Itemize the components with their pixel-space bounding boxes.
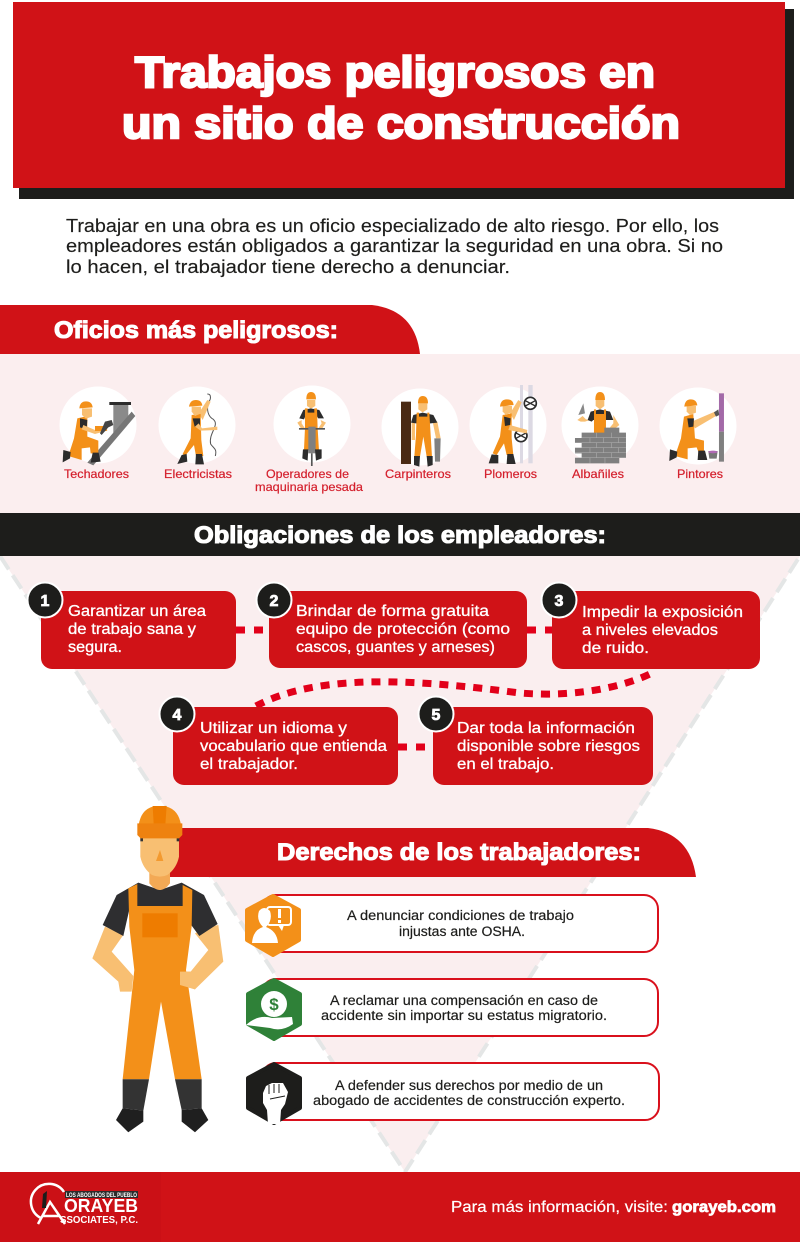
panel: inverted triangle background [0, 556, 800, 1172]
obligation 1: 1 [41, 593, 50, 610]
title banner [13, 2, 794, 199]
obligation 4 [160, 696, 398, 785]
dotted connectors [236, 630, 656, 747]
obligation 5: 5 [432, 707, 441, 724]
intro paragraph: lo hacen, el trabajador tiene derecho a denunciar. [66, 257, 510, 277]
obligation 2: equipo de protección (como [296, 621, 510, 638]
obligation 3 [542, 582, 760, 669]
right 1 [262, 895, 658, 952]
obligation 2: cascos, guantes y arneses) [296, 639, 495, 656]
obligation 3: Impedir la exposición [582, 604, 743, 621]
heading: obligaciones [0, 513, 800, 556]
obligation 1: de trabajo sana y [68, 621, 196, 638]
obligation 5: en el trabajo. [457, 756, 554, 773]
obligation 2: 2 [270, 593, 279, 610]
obligation 5: Dar toda la información [457, 720, 635, 737]
heading: oficios [0, 305, 420, 354]
trade labels: Electricistas [164, 467, 232, 481]
icon: hand with money [246, 980, 300, 1039]
trade labels: Pintores [677, 467, 723, 481]
obligation 2 [256, 582, 527, 668]
logo: LOS ABOGADOS DEL PUEBLO [66, 1192, 137, 1199]
panel: trades band [0, 354, 800, 513]
trade: operadores de maquinaria pesada [274, 386, 350, 466]
trade labels: Operadores de [266, 467, 349, 481]
obligation 3: de ruido. [582, 640, 649, 657]
icon: hand with money: $ [269, 995, 279, 1014]
heading: derechos: Derechos de los trabajadores: [277, 839, 641, 866]
intro paragraph [66, 216, 723, 277]
obligation 5: disponible sobre riesgos [457, 738, 640, 755]
trade labels: maquinaria pesada [255, 480, 363, 494]
heading: oficios: Oficios más peligrosos: [54, 317, 338, 344]
trade: pintores [660, 388, 736, 464]
obligation 1: Garantizar un área [68, 603, 206, 620]
trade: albañiles [562, 386, 638, 464]
trade labels: Techadores [64, 467, 129, 481]
trade: techadores [60, 386, 136, 465]
logo [31, 1184, 138, 1226]
right 2: accidente sin importar su estatus migratorio. [321, 1008, 607, 1023]
obligation 1: segura. [68, 639, 122, 656]
trade labels: Carpinteros [385, 467, 451, 481]
right 1: injustas ante OSHA. [399, 924, 525, 939]
trade: carpinteros [382, 388, 458, 467]
obligation 4: 4 [173, 707, 182, 724]
right 2: A reclamar una compensación en caso de [330, 993, 598, 1008]
right 3: A defender sus derechos por medio de un [335, 1078, 603, 1093]
icon: person with alert [247, 896, 299, 955]
right 2 [262, 979, 658, 1036]
trade: electricistas [158, 386, 236, 464]
logo: ORAYEB [64, 1196, 138, 1216]
obligation 5 [418, 696, 653, 785]
trade labels [64, 467, 723, 494]
logo: SSOCIATES, P.C. [60, 1215, 138, 1226]
obligation 3: a niveles elevados [582, 622, 718, 639]
right 1: A denunciar condiciones de trabajo [347, 908, 574, 923]
trade labels: Albañiles [572, 467, 624, 481]
illustration: large worker [92, 806, 223, 1132]
heading: derechos [170, 828, 696, 877]
icon: raised fist [248, 1064, 300, 1124]
trade labels: Plomeros [484, 467, 537, 481]
intro paragraph: Trabajar en una obra es un oficio especializado de alto riesgo. Por ello, los [66, 216, 719, 236]
obligation 1 [28, 582, 236, 669]
obligation 4: vocabulario que entienda [200, 738, 387, 755]
heading: obligaciones: Obligaciones de los empleadores: [194, 522, 606, 549]
right 3 [262, 1063, 659, 1120]
obligation 2: Brindar de forma gratuita [296, 603, 489, 620]
obligation 4: Utilizar un idioma y [200, 720, 347, 737]
intro paragraph: empleadores están obligados a garantizar la seguridad en una obra. Si no [66, 236, 723, 256]
obligation 4: el trabajador. [200, 756, 298, 773]
title banner: un sitio de construcción [122, 99, 680, 148]
footer: gorayeb.com [672, 1199, 776, 1216]
title banner: Trabajos peligrosos en [135, 48, 655, 97]
trade: plomeros [470, 385, 546, 464]
footer [0, 1172, 800, 1242]
right 3: abogado de accidentes de construcción experto. [313, 1093, 625, 1108]
footer: Para más información, visite: [451, 1199, 668, 1216]
obligation 3: 3 [555, 593, 564, 610]
